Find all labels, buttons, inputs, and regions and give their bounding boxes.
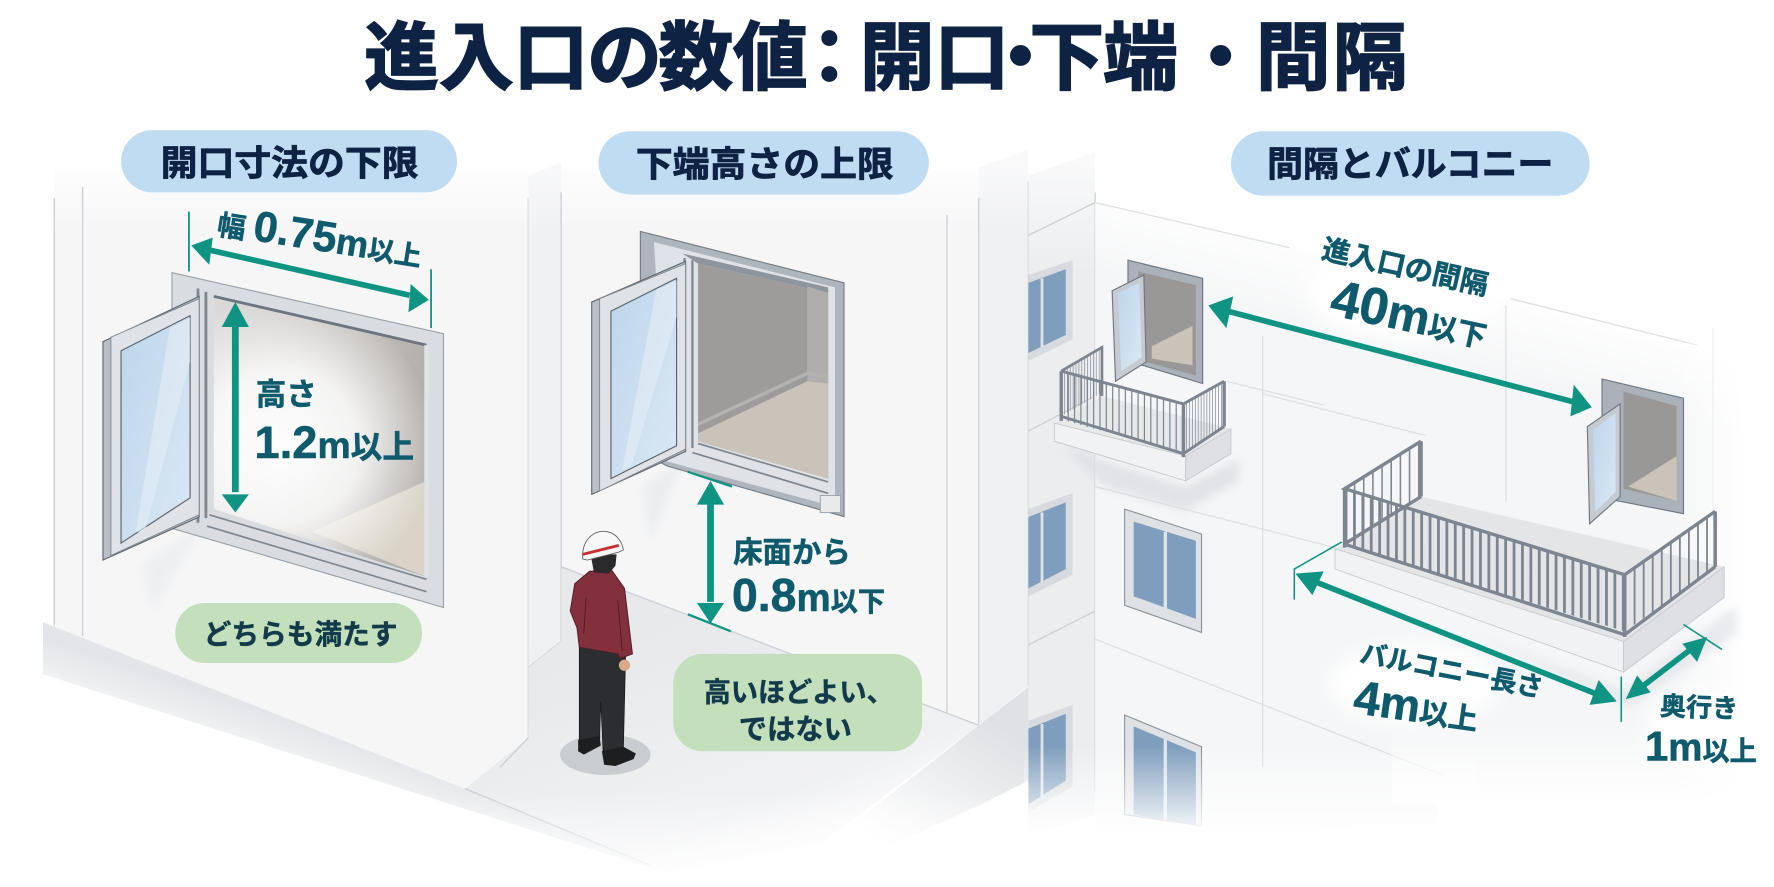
slab bbox=[1335, 497, 1724, 672]
label: width: 幅0.75m以上 bbox=[215, 197, 426, 276]
arrow: height bbox=[222, 302, 249, 513]
note: both required: どちらも満たす bbox=[204, 619, 398, 650]
scene: building backdrop bbox=[43, 149, 1041, 887]
arrow: width bbox=[189, 212, 431, 328]
label: depth: 奥行き bbox=[1660, 691, 1739, 724]
side windows bbox=[1028, 260, 1073, 812]
room interior bbox=[198, 289, 427, 592]
front window 1 bbox=[1125, 509, 1202, 632]
window frame bbox=[640, 231, 844, 517]
panel heading: opening size bbox=[121, 130, 457, 192]
arrow: interval bbox=[1208, 296, 1592, 416]
open sash bbox=[103, 296, 199, 560]
railing bbox=[1344, 441, 1715, 637]
label: depth bbox=[1645, 691, 1757, 769]
open sash bbox=[592, 261, 686, 494]
label: sill height: 0.8m以下 bbox=[732, 569, 885, 621]
note: higher is not better: ではない bbox=[739, 713, 852, 745]
head bbox=[591, 554, 617, 574]
note: higher is not better bbox=[673, 654, 922, 751]
left wall bbox=[54, 170, 528, 789]
label: sill height: 床面から bbox=[733, 536, 851, 569]
label: height: 高さ bbox=[256, 378, 317, 412]
arrow: sill height bbox=[688, 472, 732, 631]
front ledge bbox=[821, 687, 1028, 854]
arrow: depth bbox=[1626, 625, 1722, 699]
label: interval: 進入口の間隔 bbox=[1319, 233, 1491, 301]
panel heading: interval and balcony bbox=[1231, 131, 1590, 196]
soft halos behind labels bbox=[1307, 244, 1759, 769]
shadow below slab bbox=[1063, 447, 1239, 511]
slab bbox=[1054, 396, 1231, 481]
hand bbox=[619, 660, 630, 671]
side wall bbox=[1028, 153, 1095, 837]
wall shadow under sash bbox=[643, 462, 682, 541]
label: balcony length: バルコニー長さ bbox=[1358, 638, 1545, 703]
label: height bbox=[255, 378, 414, 468]
label: interval: 40m以下 bbox=[1326, 270, 1493, 359]
panel heading: sill height bbox=[598, 131, 929, 195]
front wall bbox=[1095, 201, 1774, 846]
shadow below slab bbox=[1471, 605, 1737, 707]
balcony lower right bbox=[1335, 379, 1737, 707]
front window 2 bbox=[1125, 715, 1202, 826]
jacket bbox=[570, 569, 632, 658]
panel heading: sill height: 下端高さの上限 bbox=[636, 145, 894, 184]
panel heading: opening size: 開口寸法の下限 bbox=[161, 144, 419, 183]
shoes bbox=[578, 737, 636, 766]
panel: sill height window bbox=[592, 231, 844, 541]
balcony upper left bbox=[1054, 260, 1239, 511]
label: interval bbox=[1319, 233, 1493, 359]
door bbox=[1587, 379, 1683, 524]
bottom fade of building bbox=[1024, 747, 1476, 837]
arrow: balcony length bbox=[1294, 542, 1621, 722]
wall shadow under sash bbox=[141, 526, 199, 611]
middle pier and wall bbox=[528, 149, 1028, 725]
note: both required bbox=[175, 603, 422, 663]
worker figure bbox=[560, 531, 651, 775]
room interior bbox=[682, 253, 841, 513]
curb below left wall bbox=[43, 622, 668, 873]
shadow bbox=[560, 734, 651, 775]
dimension arrows bbox=[189, 212, 1722, 722]
label: height: 1.2m以上 bbox=[255, 417, 414, 468]
panel heading: interval and balcony: 間隔とバルコニー bbox=[1267, 145, 1553, 184]
helmet bbox=[583, 531, 623, 560]
door bbox=[1112, 260, 1203, 384]
label: balcony length bbox=[1350, 638, 1545, 741]
right building bbox=[1024, 153, 1774, 846]
note: higher is not better: 高いほどよい、 bbox=[704, 676, 894, 707]
floor bbox=[465, 567, 979, 873]
label: depth: 1m以上 bbox=[1645, 722, 1757, 769]
title: 進入口の数値：開口・下端・間隔 bbox=[364, 16, 1407, 100]
window frame bbox=[172, 273, 444, 608]
panel: opening size window bbox=[103, 273, 444, 611]
label: sill height bbox=[732, 536, 885, 621]
legs bbox=[579, 645, 626, 751]
arm seam bbox=[584, 597, 622, 652]
label: balcony length: 4m以上 bbox=[1350, 671, 1482, 741]
railing bbox=[1061, 347, 1224, 457]
